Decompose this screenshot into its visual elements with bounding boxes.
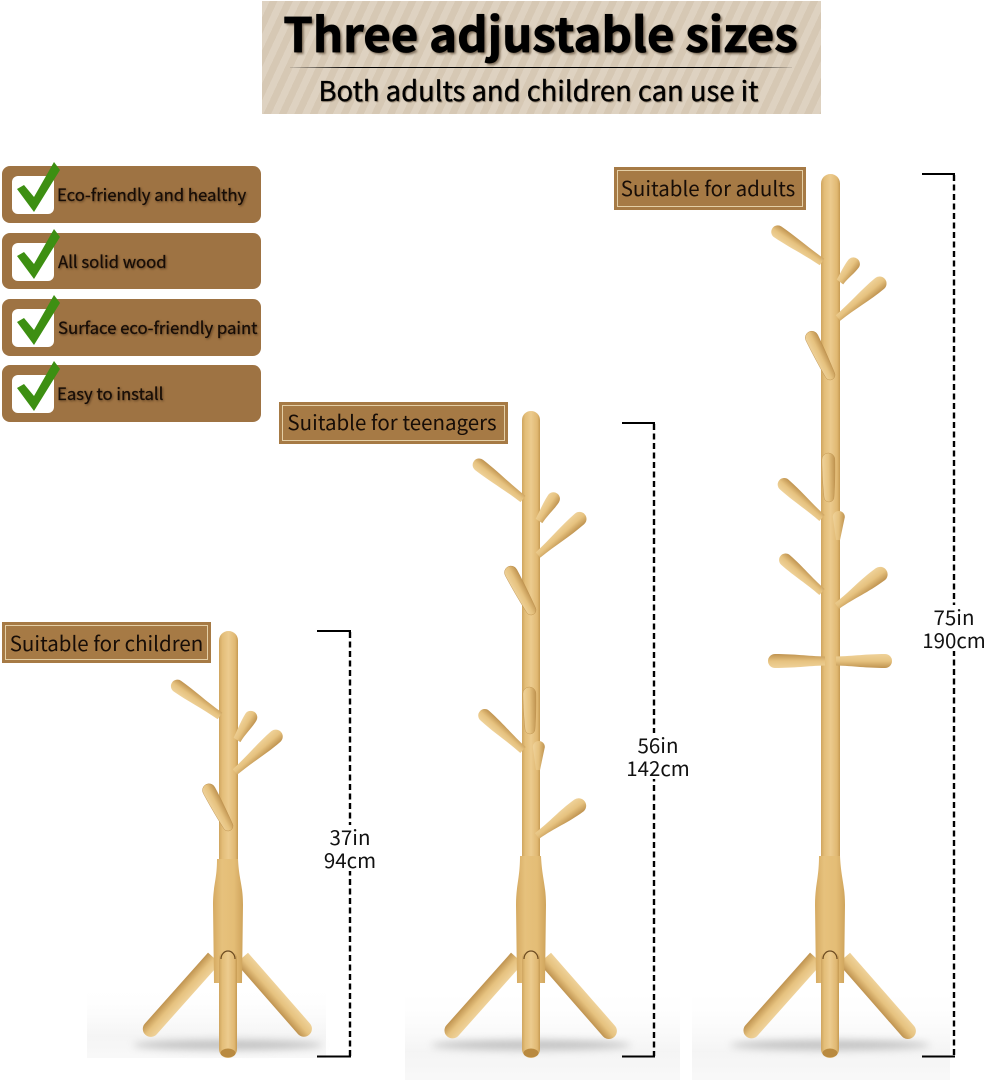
size label: teenagers: Suitable for teenagers <box>287 406 497 436</box>
peg: front left <box>502 564 539 617</box>
dimension text: adults: 75in <box>934 601 974 631</box>
size label: teenagers <box>279 402 508 444</box>
peg: lower left <box>776 551 826 597</box>
peg: upper left <box>470 456 527 504</box>
feature badge: eco-friendly <box>2 166 261 223</box>
peg: small rear right <box>832 511 845 540</box>
peg: small right <box>835 255 862 286</box>
checkbox icon <box>12 309 54 347</box>
floor shadow: children rack <box>87 985 326 1058</box>
floor shadow: teenagers rack <box>405 985 680 1080</box>
peg: horizontal right <box>836 654 892 668</box>
feature text: Easy to install <box>57 381 163 405</box>
feature badge: solid wood <box>2 233 261 289</box>
feature badge: easy install <box>2 365 261 422</box>
dimension text: children: 94cm <box>324 844 376 874</box>
size label: adults <box>614 167 806 210</box>
peg: right <box>834 274 889 323</box>
peg: front centre <box>822 453 836 502</box>
subtitle: Both adults and children can use it <box>318 69 758 109</box>
peg: right <box>230 727 286 777</box>
dimension line: adults 75in <box>922 174 955 1056</box>
peg: small right <box>231 708 260 743</box>
dimension text: adults <box>921 605 987 651</box>
peg: middle left <box>775 475 826 523</box>
feature badge: surface paint <box>2 299 261 356</box>
size label: adults: Suitable for adults <box>621 172 795 202</box>
coat rack: children height <box>140 631 315 1058</box>
header banner <box>262 1 821 114</box>
peg: upper left <box>769 223 826 267</box>
coat rack: teenagers height <box>441 411 620 1058</box>
feature text: Surface eco-friendly paint <box>58 315 257 339</box>
size label: children: Suitable for children <box>10 627 203 657</box>
checkbox icon <box>12 375 54 413</box>
peg: small right <box>534 490 562 525</box>
feature text: Eco-friendly and healthy <box>57 182 246 206</box>
peg: right <box>533 509 589 560</box>
coat rack: adults height <box>740 174 919 1058</box>
feature text: All solid wood <box>58 249 167 273</box>
dimension line: children 37in <box>317 631 351 1056</box>
size label: children <box>2 622 211 663</box>
tripod base <box>441 856 620 1058</box>
tripod base <box>140 859 315 1058</box>
peg: lower left <box>476 706 527 755</box>
dimension text: teenagers: 142cm <box>626 752 690 782</box>
peg: small rear right <box>532 741 545 770</box>
dimension text: adults: 190cm <box>922 624 986 654</box>
peg: lower right <box>533 795 589 842</box>
dimension text: teenagers <box>625 733 691 779</box>
peg: lower right <box>833 564 891 612</box>
floor shadow: adults rack <box>692 985 950 1080</box>
peg: front centre <box>523 687 537 734</box>
dimension text: teenagers: 56in <box>638 729 678 759</box>
dimension text: children: 37in <box>330 821 370 851</box>
dimension line: teenagers 56in <box>622 423 655 1056</box>
peg: upper left <box>168 677 224 721</box>
tripod base <box>740 856 919 1058</box>
checkbox icon <box>12 243 54 281</box>
peg: front left <box>803 329 838 382</box>
peg: horizontal left <box>768 654 825 668</box>
dimension text: children <box>322 825 378 871</box>
checkbox icon <box>12 176 54 214</box>
peg: front left <box>200 781 236 833</box>
